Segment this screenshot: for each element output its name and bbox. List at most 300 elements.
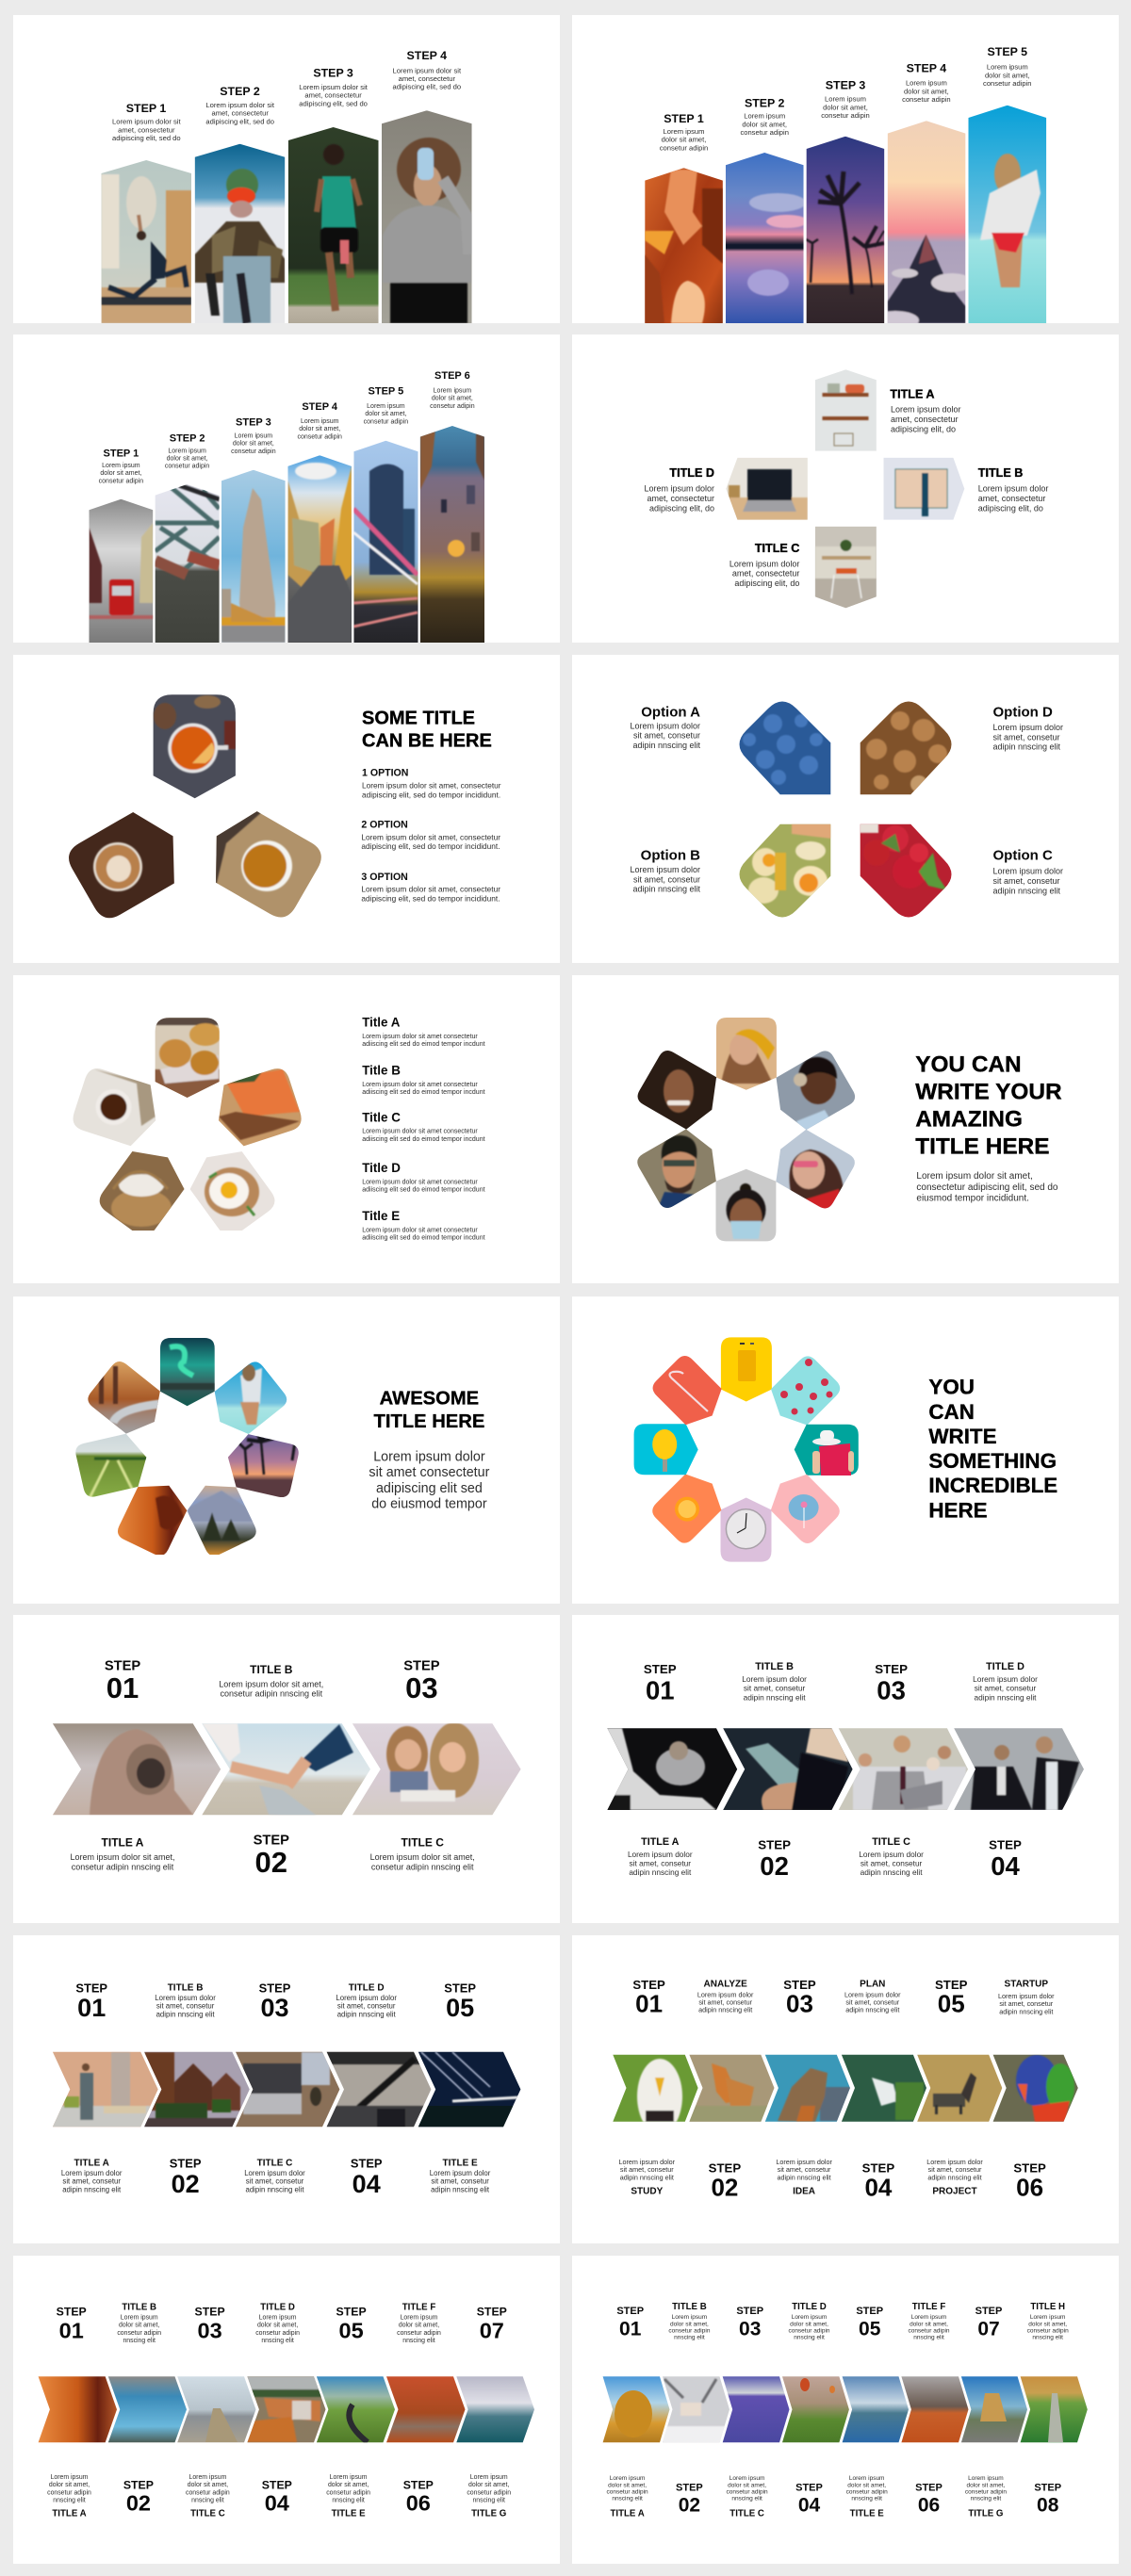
text: title D: consetur adipin [788,2327,830,2334]
text: title C: TITLE C [402,1835,444,1849]
text: study: adipin nnscing elit [620,2173,674,2181]
text: startup: adipin nnscing elit [999,2007,1053,2015]
text: plan: sit amet, consetur [845,1997,900,2006]
text: title C: consetur adipin [186,2489,230,2496]
text: step 5: dolor sit amet, [985,71,1030,79]
text: step 05: 05 [339,2318,364,2342]
text: analyze: sit amet, consetur [698,1997,753,2006]
photo: green field [74,1427,149,1503]
text: title E: Lorem ipsum [849,2475,884,2482]
text: title F: TITLE F [912,2302,945,2312]
text: title E: TITLE E [332,2509,366,2519]
text: title B: adiiscing elit sed do eimod tempor incdunt [362,1089,485,1096]
text: step 2: consetur adipin [165,464,209,470]
text: step 05: STEP [444,1981,476,1995]
text: option A: Option A [641,705,700,721]
text: title B: sit amet, consetur [744,1684,806,1693]
text: step 01: STEP [75,1981,107,1995]
text: title H: TITLE H [1030,2302,1065,2312]
photo: tea cup [153,694,236,799]
text: step 01: STEP [616,2306,644,2317]
text: option A: Lorem ipsum dolor [630,721,700,730]
text: title A: TITLE A [890,387,935,400]
text: step 4: adipiscing elit, sed do [392,83,461,91]
text: title D: nnscing elit [261,2338,294,2344]
text: option D: Option D [993,705,1053,721]
text: title D: Lorem ipsum dolor [644,484,714,494]
photo: purple sunset lake [726,153,808,323]
heading: you can write your amazing title here: WRITE YOUR [915,1080,1062,1105]
text: step 3: dolor sit amet, [233,441,274,448]
text: title F: dolor sit amet, [399,2323,439,2329]
text: project: sit amet, consetur [928,2165,982,2174]
photo: canyon [645,168,723,323]
chevron: two businessmen [954,1728,1085,1810]
text: title B: sit amet, consetur [156,2002,215,2011]
photo: blueberries [739,701,831,795]
text: 2 option: adipiscing elit, sed do tempor incididunt. [361,841,500,851]
text: step 2: dolor sit amet, [742,120,787,128]
panel: five foods ring [13,975,560,1283]
text: analyze: Lorem ipsum dolor [697,1990,754,1998]
text: description: eiusmod tempor incididunt. [916,1194,1029,1204]
text: title E: nnscing elit [332,2497,365,2503]
chevron: egret [841,2054,927,2122]
chevron: mountain lake [842,2376,910,2443]
text: title C: Lorem ipsum dolor [859,1850,924,1859]
text: description: consectetur adipiscing elit, sed do [916,1182,1058,1193]
text: title C: dolor sit amet, [188,2482,228,2488]
text: title D: sit amet, consetur [337,2002,396,2011]
chevron: night light tunnel [418,2051,521,2128]
text: step 01: 01 [635,1990,663,2018]
text: title E: Lorem ipsum dolor [430,2169,491,2177]
text: idea: adipin nnscing elit [778,2173,831,2181]
text: title H: Lorem ipsum [1030,2314,1065,2321]
text: step 03: 03 [198,2318,222,2342]
chevron: fox [689,2054,775,2122]
photo: woman with yellow beanie [715,1017,778,1091]
panel: three chevrons [13,1615,560,1923]
text: step 01: 01 [77,1994,106,2022]
text: title C: Lorem ipsum [729,2475,764,2482]
text: title D: adipiscing elit, do [649,503,714,513]
text: option C: Option C [993,847,1053,863]
text: title B: nnscing elit [674,2335,705,2341]
icon: woman in sun hat on teal [795,1425,859,1475]
text: step 4: amet, consectetur [399,74,455,83]
text: title G: TITLE G [471,2509,506,2519]
chevron: rust forest [386,2376,467,2443]
text: title F: nnscing elit [402,2338,435,2344]
text: step 05: STEP [935,1978,968,1992]
text: title G: dolor sit amet, [966,2482,1006,2488]
text: title D: dolor sit amet, [257,2323,298,2329]
text: step 1: consetur adipin [660,143,708,152]
text: step 03: 03 [405,1671,438,1704]
photo: woman in pink sunglasses [775,1128,856,1217]
text: title B: Title B [362,1064,401,1078]
text: step 4: consetur adipin [297,433,342,440]
text: step 4: STEP 4 [302,401,338,413]
text: step 04: 04 [265,2491,289,2516]
text: step 4: consetur adipin [902,95,951,104]
text: step 03: 03 [739,2318,761,2340]
text: title A: TITLE A [641,1836,680,1848]
chevron: pug in blanket [52,1723,221,1816]
text: title E: TITLE E [442,2158,478,2168]
panel: four foods with options [572,655,1119,963]
photo: snowboarder [195,144,285,323]
text: option B: adipin nnscing elit [632,885,700,894]
text: step 04: 04 [864,2174,893,2202]
text: step 06: STEP [403,2479,434,2492]
text: step 4: Lorem ipsum [301,418,339,425]
panel: five chevrons [13,1935,560,2243]
text: step 03: 03 [786,1990,813,2018]
heading: you can write your amazing title here: AMAZING [915,1107,1023,1133]
text: idea: IDEA [793,2187,815,2197]
photo: autumn road [86,1361,161,1437]
photo: steel bridge [156,484,220,643]
photo: curly haired woman [637,1041,718,1131]
text: step 02: 02 [172,2170,200,2198]
text: title D: Lorem ipsum [259,2315,297,2322]
text: title C: Lorem ipsum dolor sit amet, [370,1852,475,1862]
photo: woman in sea [969,106,1046,323]
panel: seven chevrons, travel [13,2256,560,2564]
text: step 04: STEP [351,2157,383,2171]
panel: five step columns, landscapes [572,15,1119,330]
text: step 1: STEP 1 [664,112,704,125]
text: step 03: STEP [259,1981,291,1995]
text: step 6: Lorem ipsum [434,388,471,395]
text: step 05: 05 [859,2318,881,2340]
text: title B: Lorem ipsum dolor [155,1994,216,2002]
text: title C: Lorem ipsum dolor sit amet consectetur [362,1129,478,1135]
text: startup: STARTUP [1005,1980,1048,1990]
text: title B: TITLE B [168,1982,203,1993]
text: step 05: 05 [446,1994,474,2022]
text: step 4: STEP 4 [407,49,447,62]
heading: you can write something incredible here: HERE [928,1499,988,1523]
text: step 01: STEP [632,1978,665,1992]
icon: cherries on mint [762,1352,844,1434]
text: step 1: STEP 1 [126,102,166,115]
text: title A: Lorem ipsum dolor sit amet, [70,1852,175,1862]
text: title F: Lorem ipsum [401,2315,438,2322]
text: title C: sit amet, consetur [246,2177,304,2186]
text: title D: Lorem ipsum dolor sit amet consectetur [362,1179,478,1185]
chevron: brick houses [144,2051,250,2128]
text: step 5: consetur adipin [364,418,408,425]
text: title E: Lorem ipsum dolor sit amet consectetur [362,1227,478,1234]
icon: lollipop on pink [762,1466,844,1547]
text: step 06: 06 [918,2495,940,2517]
text: 1 option: Lorem ipsum dolor sit amet, consectetur [362,781,501,791]
text: step 08: 08 [1037,2495,1059,2517]
text: step 01: STEP [105,1658,140,1673]
text: 1 option: adipiscing elit, sed do tempor incididunt. [362,790,500,799]
text: title C: Lorem ipsum dolor [729,559,799,568]
chevron: glacier [107,2376,188,2443]
text: title C: nnscing elit [731,2496,762,2503]
text: title A: TITLE A [102,1835,144,1849]
text: step 5: STEP 5 [369,386,403,398]
text: title A: nnscing elit [53,2497,86,2503]
text: step 5: STEP 5 [988,45,1027,58]
text: study: sit amet, consetur [620,2165,674,2174]
text: step 01: 01 [107,1671,139,1704]
chevron: holding hands [202,1723,371,1818]
text: step 03: 03 [260,1994,289,2022]
text: title C: sit amet, consetur [861,1859,923,1868]
chevron: pier [177,2376,257,2443]
text: title E: dolor sit amet, [847,2482,886,2488]
text: step 3: Lorem ipsum [235,433,272,440]
text: step 06: STEP [1013,2161,1046,2176]
text: step 5: consetur adipin [983,79,1032,88]
text: step 4: dolor sit amet, [904,87,949,95]
text: step 08: STEP [1034,2483,1061,2494]
text: step 4: Lorem ipsum dolor sit [393,66,462,75]
text: title A: consetur adipin [607,2488,648,2495]
text: step 1: Lorem ipsum dolor sit [112,118,181,126]
text: title H: dolor sit amet, [1028,2321,1067,2327]
text: title B: dolor sit amet, [119,2323,159,2329]
text: step 03: STEP [875,1662,908,1676]
text: title C: TITLE C [729,2509,764,2519]
text: title B: TITLE B [672,2302,707,2312]
text: step 06: 06 [1016,2174,1043,2202]
text: title E: adipin nnscing elit [431,2185,490,2193]
text: title A: adipin nnscing elit [62,2185,122,2193]
text: title C: consetur adipin [727,2488,768,2495]
text: step 07: STEP [477,2306,507,2319]
icon: yellow power bank [721,1337,772,1402]
text: title D: adipin nnscing elit [975,1692,1037,1702]
text: step 07: 07 [480,2318,504,2342]
photo: yoga [102,160,191,323]
text: title D: Lorem ipsum dolor [336,1994,397,2002]
text: project: Lorem ipsum dolor [926,2158,983,2166]
text: step 2: STEP 2 [220,85,260,98]
text: step 2: Lorem ipsum [744,112,785,121]
text: plan: Lorem ipsum dolor [844,1990,901,1998]
text: step 3: STEP 3 [826,79,865,92]
text: option C: sit amet, consetur [993,876,1060,886]
text: analyze: ANALYZE [704,1980,747,1990]
text: option A: sit amet, consetur [633,731,700,741]
text: plan: adipin nnscing elit [845,2006,899,2014]
photo: laptop [726,458,808,520]
text: option B: Lorem ipsum dolor [630,865,700,874]
text: step 4: STEP 4 [907,62,946,75]
text: step 3: dolor sit amet, [823,103,868,111]
text: title B: TITLE B [250,1663,293,1676]
text: title A: consetur adipin [47,2489,91,2496]
text: step 1: STEP 1 [104,448,139,459]
photo: flatiron [221,470,286,643]
photo: orange canyon [115,1479,190,1555]
text: step 01: 01 [646,1676,675,1705]
text: title G: consetur adipin [467,2489,511,2496]
text: step 02: STEP [123,2479,154,2492]
text: step 3: Lorem ipsum [825,95,866,104]
text: title B: Lorem ipsum [672,2314,707,2321]
text: step 03: STEP [403,1658,440,1673]
text: title A: adiiscing elit sed do eimod tempor incdunt [362,1041,485,1048]
text: title A: Lorem ipsum dolor [891,405,961,415]
text: step 6: consetur adipin [430,403,475,410]
text: option D: sit amet, consetur [993,732,1060,742]
heading: awesome title here: TITLE HERE [374,1411,484,1432]
text: title D: dolor sit amet, [790,2321,828,2327]
photo: palm sunset [806,137,884,323]
text: 2 option: 2 OPTION [361,820,408,831]
panel: seven landscapes ring [13,1296,560,1604]
text: option C: Lorem ipsum dolor [993,867,1063,876]
text: step 04: 04 [991,1851,1020,1881]
text: title A: Lorem ipsum [51,2474,89,2481]
panel: six chevrons, animals [572,1935,1119,2243]
text: title C: Lorem ipsum [188,2474,227,2481]
chevron: man by brick wall [52,2051,158,2128]
text: title F: nnscing elit [913,2335,944,2341]
icon: yellow paddle [634,1424,698,1475]
text: title C: Lorem ipsum dolor [244,2169,305,2177]
text: option C: adipin nnscing elit [993,886,1061,895]
text: step 02: STEP [676,2483,703,2494]
text: title G: Lorem ipsum [968,2475,1004,2482]
text: step 4: dolor sit amet, [299,426,340,432]
text: title D: TITLE D [792,2302,827,2312]
photo: man with headphones [775,1041,856,1131]
text: title G: dolor sit amet, [468,2482,509,2488]
text: title A: Lorem ipsum [610,2475,645,2482]
text: title E: adiiscing elit sed do eimod tempor incdunt [362,1234,485,1241]
text: step 3: consetur adipin [821,111,870,120]
photo: dining chair [815,527,877,609]
text: title A: Lorem ipsum dolor [61,2169,123,2177]
chevron: autumn farm road [1020,2376,1088,2443]
text: title B: Lorem ipsum dolor sit amet, [219,1679,323,1688]
text: option B: Option B [641,848,700,864]
text: title C: adipin nnscing elit [861,1867,923,1877]
text: step 5: Lorem ipsum [987,63,1028,72]
photo: aurora [159,1337,216,1407]
text: step 03: STEP [195,2306,225,2319]
text: step 04: STEP [989,1837,1022,1851]
heading: you can write your amazing title here: YOU CAN [915,1052,1022,1078]
panel: four titles around a cross [572,334,1119,643]
photo: night building [420,426,484,643]
text: step 3: STEP 3 [313,66,353,79]
text: title B: amet, consectetur [978,494,1045,503]
text: study: Lorem ipsum dolor [619,2158,676,2166]
chevron: two girls with a tablet [352,1722,521,1816]
text: title G: TITLE G [968,2509,1003,2519]
photo: walnuts [860,701,952,795]
photo: snowy mountains and pines [184,1479,259,1555]
chevron: coastal town [247,2376,327,2443]
text: title C: consetur adipin nnscing elit [371,1862,474,1871]
text: 3 option: adipiscing elit, sed do tempor incididunt. [361,894,500,904]
text: step 05: STEP [336,2306,367,2319]
photo: woman in water [213,1361,288,1437]
text: project: adipin nnscing elit [927,2173,982,2181]
chevron: business team [838,1728,969,1810]
text: title B: Lorem ipsum [121,2315,158,2322]
text: step 1: dolor sit amet, [100,470,141,477]
text: title D: consetur adipin [255,2330,300,2337]
text: step 04: STEP [795,2483,823,2494]
text: step 02: STEP [170,2157,202,2171]
text: step 2: STEP 2 [170,433,205,445]
text: title C: adipiscing elit, do [734,579,799,588]
text: title E: Lorem ipsum [330,2474,368,2481]
text: title A: adipin nnscing elit [629,1867,692,1877]
heading: you can write something incredible here: CAN [928,1400,975,1424]
photo: runner [288,127,379,323]
text: title C: nnscing elit [191,2497,224,2503]
text: step 3: Lorem ipsum dolor sit [299,83,369,91]
chevron: snowy fjord [456,2376,535,2443]
chevron: red rock desert [901,2376,969,2443]
text: step 04: STEP [262,2479,292,2492]
text: option B: sit amet, consetur [633,874,700,884]
text: step 01: STEP [644,1662,677,1676]
text: step 2: amet, consectetur [212,109,269,118]
text: step 07: 07 [977,2318,1000,2340]
text: step 1: amet, consectetur [118,125,175,134]
chevron: laptop on wood [236,2051,340,2128]
text: step 06: 06 [406,2491,431,2516]
text: title B: Lorem ipsum dolor sit amet consectetur [362,1082,478,1088]
text: title D: TITLE D [986,1661,1024,1672]
text: title E: consetur adipin [326,2489,370,2496]
panel: four chevrons [572,1615,1119,1923]
icon: wall clock on lilac [720,1498,771,1562]
chevron: eagle [613,2054,698,2134]
text: step 3: STEP 3 [236,416,271,428]
text: 3 option: Lorem ipsum dolor sit amet, consectetur [361,885,500,894]
heading: some title can be here: CAN BE HERE [362,731,492,752]
text: analyze: adipin nnscing elit [698,2006,752,2014]
photo: mushroom basket [99,1148,186,1231]
icon: candy cane [649,1352,730,1433]
text: title C: TITLE C [872,1836,910,1848]
text: idea: Lorem ipsum dolor [776,2158,832,2166]
text: title A: TITLE A [52,2509,87,2519]
text: title F: dolor sit amet, [910,2321,948,2327]
text: title G: nnscing elit [971,2496,1001,2503]
text: 1 option: 1 OPTION [362,768,408,779]
text: step 1: Lorem ipsum [664,127,704,136]
text: title E: dolor sit amet, [328,2482,369,2488]
text: title C: TITLE C [755,542,799,555]
text: title E: TITLE E [850,2509,884,2519]
text: description: do eiusmod tempor [371,1496,487,1511]
text: title A: adipiscing elit, do [891,424,956,433]
text: title C: adiiscing elit sed do eimod tempor incdunt [362,1136,485,1143]
panel: four step columns, active people [13,15,560,323]
text: title B: adipin nnscing elit [744,1692,806,1702]
text: study: STUDY [631,2187,664,2197]
chevron: modern interior [326,2051,432,2128]
text: step 04: 04 [798,2495,820,2517]
text: title F: Lorem ipsum [911,2314,946,2321]
